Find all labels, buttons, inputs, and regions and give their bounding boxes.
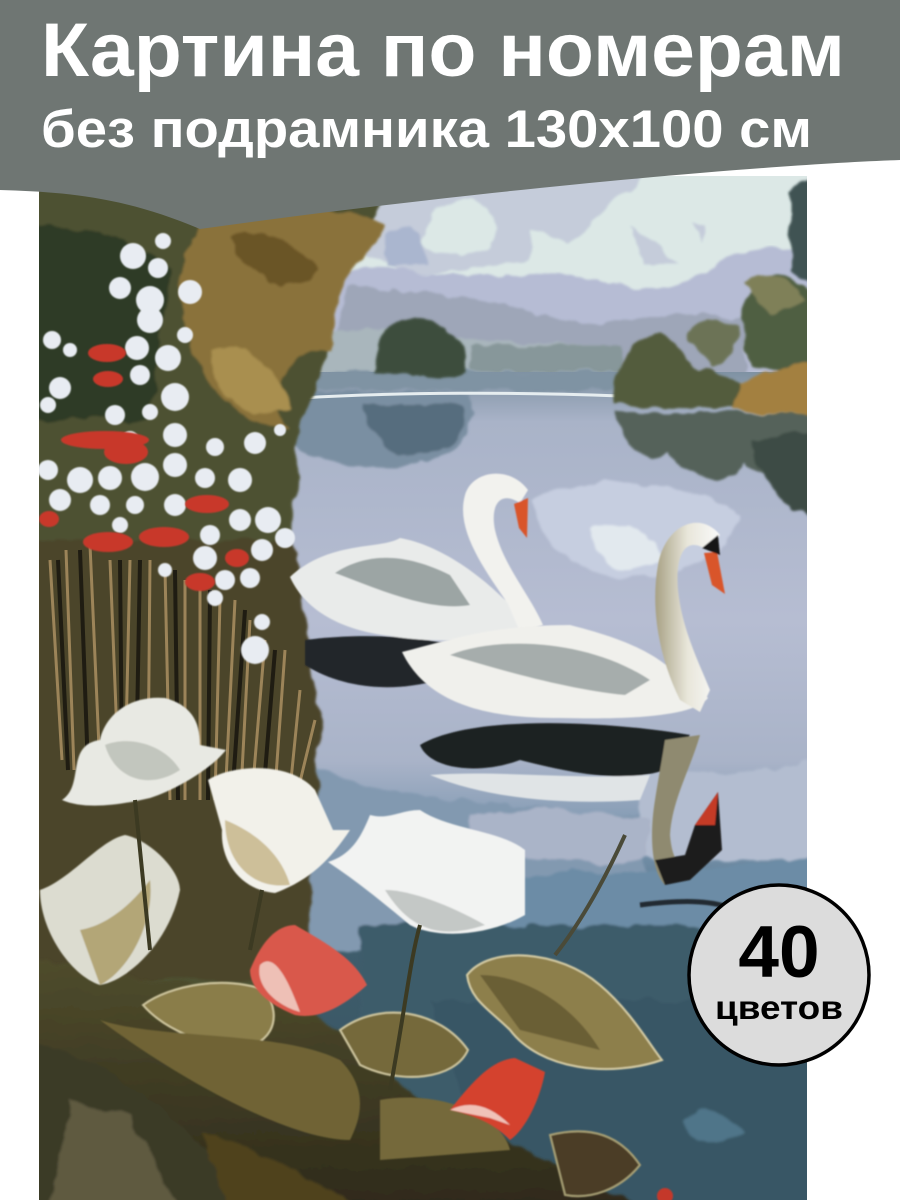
front swan reflection [420, 723, 690, 776]
far trees [374, 180, 815, 415]
foreground shore [39, 982, 632, 1200]
white blossoms [38, 233, 295, 664]
stems [135, 800, 625, 1090]
front swan neck reflection [652, 735, 700, 885]
front swan [402, 523, 730, 908]
water reflections [285, 372, 815, 1200]
subtitle: без подрамника 130х100 см [41, 100, 812, 159]
badge: 40 colours [689, 885, 869, 1065]
badge number: 40 [738, 912, 820, 993]
red lotus buds [250, 925, 673, 1200]
sky [350, 176, 807, 291]
painting: swans on a lake [30, 170, 820, 1200]
mountains [300, 248, 815, 378]
reeds [50, 545, 315, 820]
left bank foliage and tree [30, 176, 385, 1000]
red poppies [39, 344, 249, 591]
header banner [0, 0, 900, 229]
white lotus flowers [40, 698, 525, 985]
back swan reflection [304, 635, 442, 688]
lily leaves [100, 955, 662, 1196]
title: Картина по номерам [41, 8, 845, 93]
badge label: цветов [715, 989, 843, 1026]
back swan [290, 474, 543, 687]
water highlight line [300, 393, 620, 398]
water [290, 372, 807, 1033]
reflected head and beak [655, 792, 722, 885]
